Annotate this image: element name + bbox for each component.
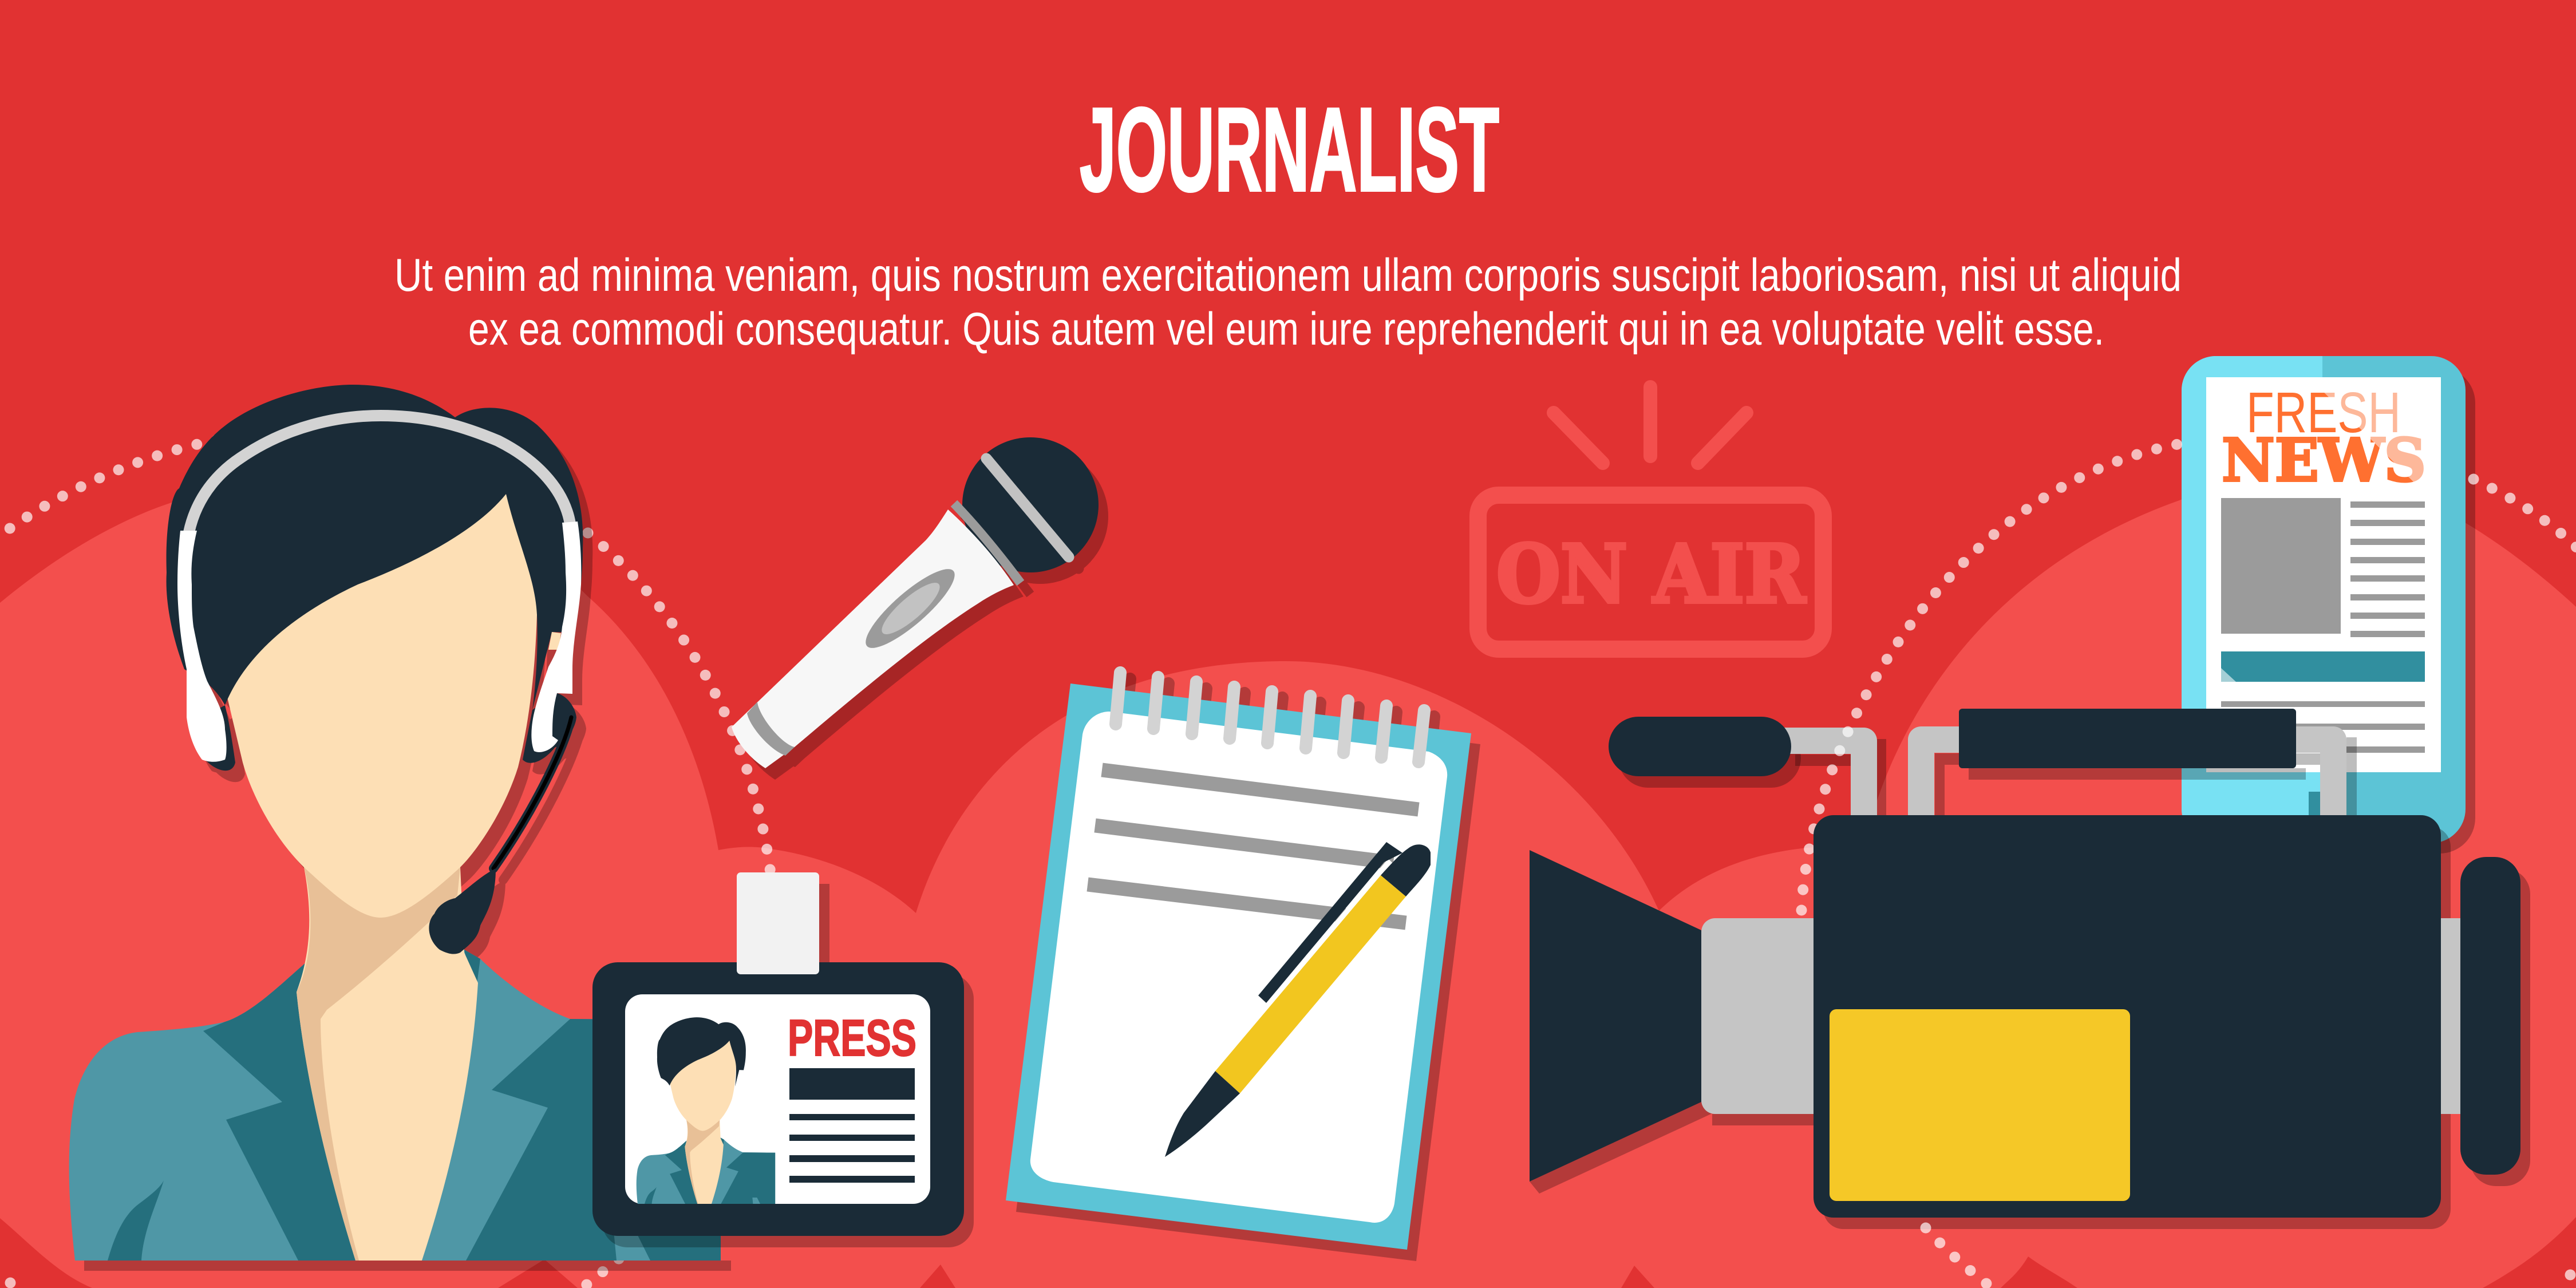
right bracket (1921, 740, 2333, 819)
headset (177, 416, 581, 954)
pen (1165, 842, 1431, 1157)
on air label: ON AIR (1496, 528, 1807, 622)
camera left handle (1609, 717, 1864, 819)
notepad cover (1006, 683, 1471, 1250)
sign frame (1478, 495, 1823, 649)
video camera (1530, 709, 2520, 1218)
background hills (0, 472, 2576, 1288)
article column (2350, 501, 2425, 637)
lens hood (1530, 850, 1701, 1182)
display panel (1830, 1009, 2130, 1201)
badge card (625, 994, 930, 1204)
lens barrel (1701, 918, 1833, 1114)
description text: Ut enim ad minima veniam, quis nostrum exercitationem ullam corporis suscipit laboriosam, nisi ut aliquid (394, 250, 2182, 301)
face and hair (167, 385, 583, 918)
left bracket (1780, 741, 1864, 819)
press badge (592, 872, 964, 1236)
jacket bottom shadow (84, 1261, 731, 1271)
smartphone shadow (2191, 368, 2475, 854)
handheld microphone (732, 437, 1099, 768)
news headline: NEWS (2222, 426, 2426, 495)
note lines (1088, 770, 1419, 923)
smartphone with news (2182, 356, 2466, 843)
phone button (2309, 792, 2321, 817)
badge holder (592, 962, 964, 1236)
id photo (637, 1017, 775, 1204)
pen clip (1266, 859, 1397, 1009)
badge clip (737, 872, 819, 974)
badge text lines (789, 1068, 915, 1183)
pen cap (1381, 844, 1431, 896)
teal banner (2221, 651, 2425, 682)
fresh headline: FRESH (2246, 381, 2401, 445)
phone light half (2182, 356, 2322, 843)
journalist figure (69, 385, 721, 1261)
journalist shadow (176, 396, 592, 966)
news image (2221, 498, 2341, 634)
phone case (2182, 356, 2466, 843)
signal rays (1554, 387, 1747, 463)
on air sign (1478, 387, 1823, 649)
title: JOURNALIST (1080, 84, 1499, 216)
press badge shadow (602, 884, 974, 1247)
screen (2206, 377, 2441, 772)
press label: PRESS (788, 1010, 916, 1067)
neck and chest (297, 867, 478, 1261)
dotted arcs left (0, 438, 771, 1288)
pen body (1215, 875, 1406, 1093)
rear barrel (2427, 918, 2467, 1114)
eyepiece (2460, 857, 2520, 1175)
description text: ex ea commodi consequatur. Quis autem vel eum iure reprehenderit qui in ea voluptate velit esse. (468, 303, 2104, 355)
banner fold (2221, 668, 2236, 682)
dotted arcs right (1801, 444, 2576, 1288)
lower article lines (2221, 701, 2425, 753)
handheld microphone shadow (741, 449, 1108, 780)
notepad (1006, 673, 1471, 1250)
pen nib (1165, 1071, 1240, 1157)
notepad paper (1030, 712, 1447, 1223)
rear grip (1609, 717, 1791, 776)
jacket (69, 950, 721, 1261)
spiral rings (1116, 673, 1424, 762)
top grip (1959, 709, 2296, 768)
notepad shadow (1016, 679, 1480, 1261)
description text (394, 250, 2182, 355)
camera shadow (1530, 728, 2530, 1229)
camera body (1814, 815, 2441, 1218)
